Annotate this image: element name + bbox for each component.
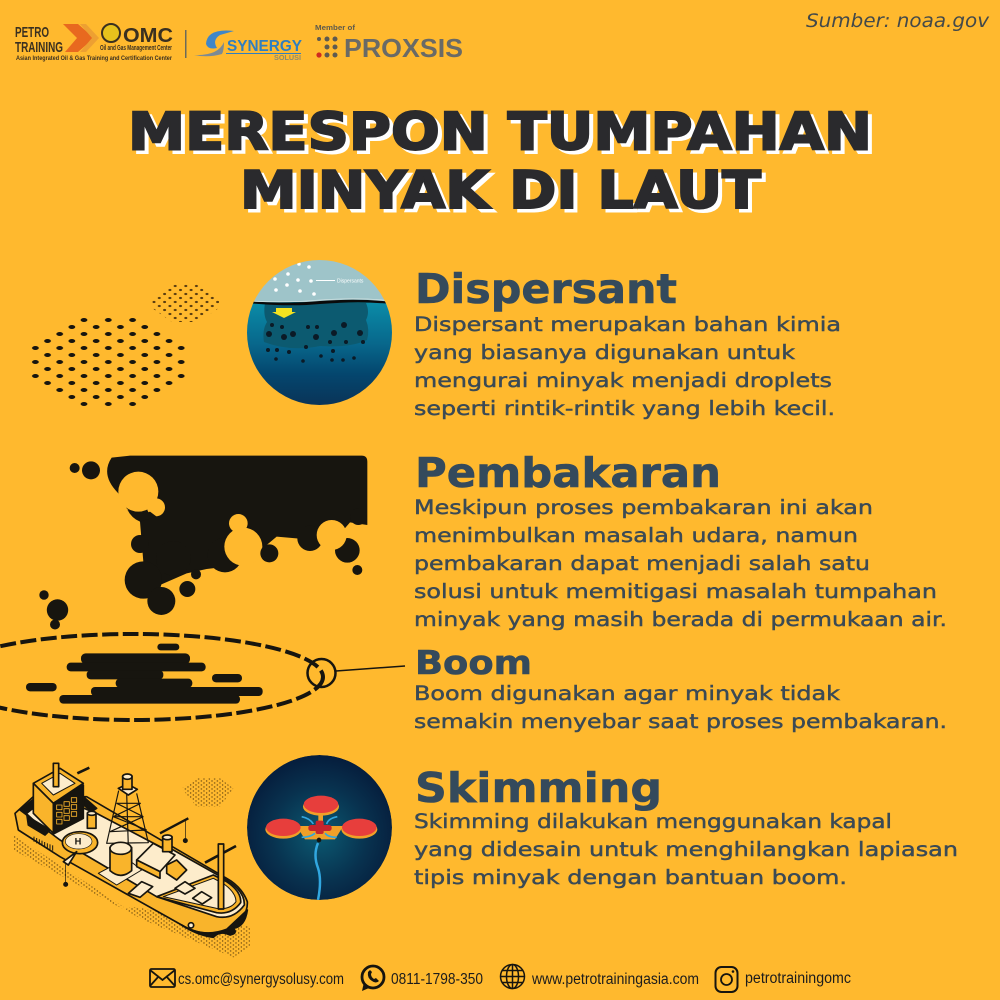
icon: instagram [716,967,738,992]
logo: Proxsis: Member of [315,23,356,32]
text: Dispersant description: mengurai minyak menjadi droplets [414,369,832,392]
logo: Petro Training: TRAINING [15,39,63,56]
text: phone: 0811-1798-350 [391,971,483,988]
text: Pembakaran description: Meskipun proses pembakaran ini akan [414,496,873,519]
illustration: oil slick [26,644,263,704]
text: Dispersant description: Dispersant merupakan bahan kimia [414,313,841,336]
logo divider [185,30,186,58]
icon: envelope [150,969,175,987]
title: MINYAK DI LAUT [244,164,766,224]
logo: Petro Training [15,24,173,62]
text: Skimming description: yang didesain untuk menghilangkan lapiasan [414,838,958,861]
icon: whatsapp [362,966,384,991]
logo: Petro Training: Oil and Gas Management Center [100,45,172,52]
illustration: oil slick droplets [39,590,68,630]
logo: Petro Training: OMC [123,25,173,47]
text: instagram handle: petrotrainingomc [745,970,851,987]
title [128,102,876,224]
boom callout [308,659,405,687]
dispersant circle illustration: Dispersants [337,278,364,284]
logo: Synergy Solusi [194,31,302,62]
text: Dispersant description [414,313,841,420]
illustration: boom ellipse [0,634,323,720]
illustration: black smoke [70,456,371,615]
illustration: ship [13,763,250,957]
text: Boom description: semakin menyebar saat proses pembakaran. [414,710,947,733]
heading: Dispersant: Dispersant [415,265,677,313]
text: Pembakaran description [414,496,947,631]
logo: Synergy Solusi: SYNERGY [227,38,302,55]
text: website: www.petrotrainingasia.com [531,971,699,988]
heading: Boom: Boom [415,643,532,682]
text: Pembakaran description: menimbulkan masalah udara, namun [414,524,858,547]
dispersant circle illustration [247,260,392,405]
source credit: Sumber: noaa.gov [806,10,990,32]
text: Dispersant description: yang biasanya digunakan untuk [414,341,796,364]
text: email: cs.omc@synergysolusy.com [178,971,344,988]
text: Skimming description [414,810,958,889]
icon: globe [500,964,524,988]
logo: Proxsis: PROXSIS [344,33,463,63]
text: Boom description [414,682,947,733]
text: Dispersant description: seperti rintik-rintik yang lebih kecil. [414,397,835,420]
title: MERESPON TUMPAHAN [128,102,872,162]
logo: Petro Training: Asian Integrated Oil & Gas Training and Certification Center [16,56,173,62]
logo: Petro Training: PETRO [15,24,49,41]
text: Pembakaran description: minyak yang masih berada di permukaan air. [414,608,947,631]
heading: Pembakaran: Pembakaran [415,449,721,497]
dot pattern large [30,316,187,408]
logo: Proxsis [315,23,463,63]
illustration: ship: H [75,837,82,847]
skimming circle illustration [247,755,392,900]
text: Skimming description: tipis minyak dengan bantuan boom. [414,866,847,889]
text: Pembakaran description: pembakaran dapat menjadi salah satu [414,552,870,575]
title: MERESPON TUMPAHAN [132,106,876,166]
text: Pembakaran description: solusi untuk memitigasi masalah tumpahan [414,580,937,603]
text: Boom description: Boom digunakan agar minyak tidak [414,682,841,705]
header logos [15,23,463,63]
text: Skimming description: Skimming dilakukan menggunakan kapal [414,810,892,833]
dot pattern small [152,284,219,322]
footer contacts [150,964,851,992]
logo: Synergy Solusi: SOLUSI [274,55,301,62]
heading: Skimming: Skimming [415,764,662,812]
title: MINYAK DI LAUT [240,161,762,221]
